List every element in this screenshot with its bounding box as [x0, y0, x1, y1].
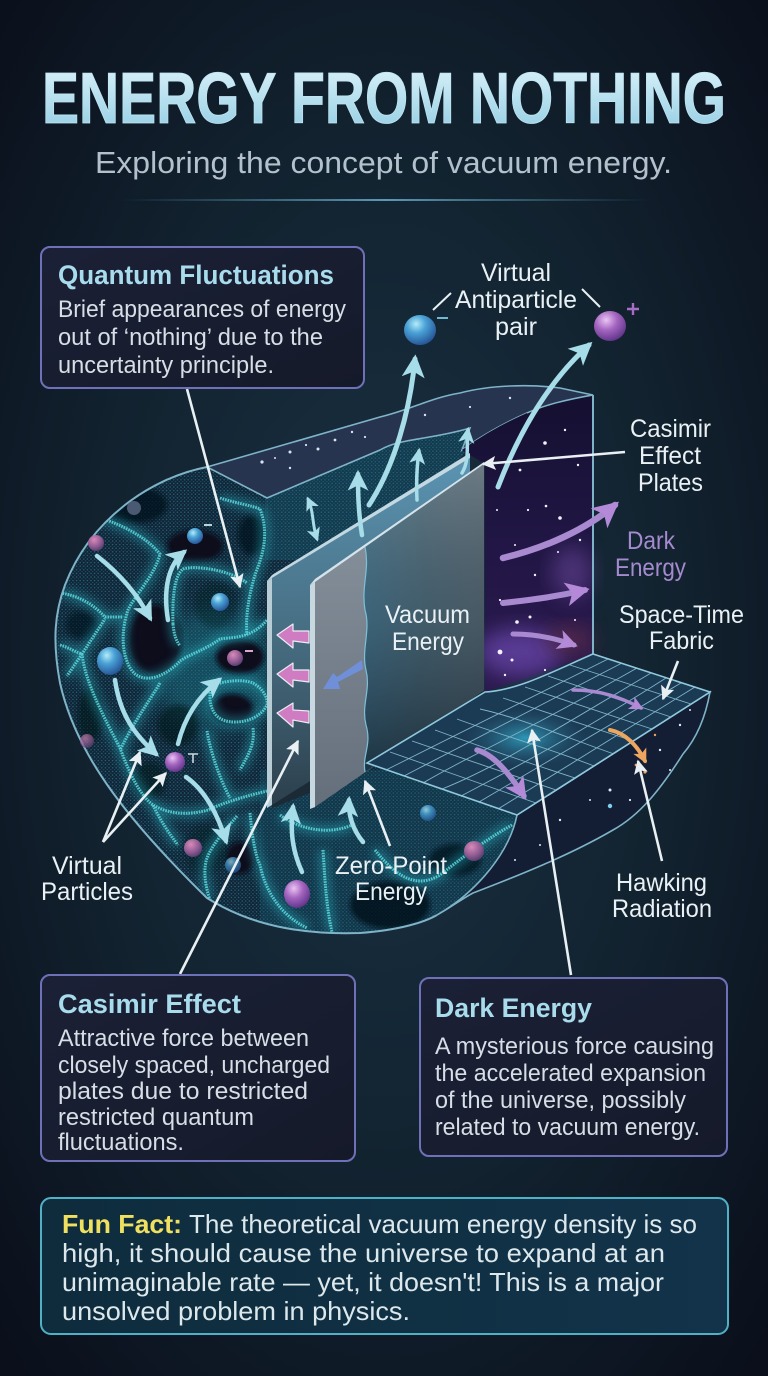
- glowing veins: [60, 498, 512, 932]
- diagram: vacuum energy cross-section: [41, 259, 744, 975]
- body: quantum fluctuations: Brief appearances of energy: [58, 296, 346, 323]
- dark energy arrows: [477, 505, 641, 796]
- label: dark energy: [615, 527, 686, 582]
- heading: dark energy: Dark Energy: [435, 993, 592, 1023]
- dark cells: [66, 487, 481, 929]
- label: hawking radiation: [612, 869, 712, 923]
- panel: fun fact: [41, 1198, 728, 1334]
- label: virtual particles: [41, 852, 133, 906]
- body: casimir effect: restricted quantum: [58, 1104, 254, 1131]
- label: hawking radiation: Hawking: [616, 869, 707, 897]
- panel: casimir effect: [41, 975, 355, 1161]
- label: casimir effect plates: Plates: [638, 469, 703, 497]
- body: quantum fluctuations: out of ‘nothing’ due to the: [58, 324, 323, 351]
- label: vacuum energy: Energy: [392, 628, 464, 656]
- label: zero-point energy: [335, 852, 447, 906]
- fun fact text: high, it should cause the universe to expand at an: [62, 1238, 665, 1268]
- label: casimir effect plates: Effect: [639, 442, 701, 470]
- label: dark energy: Dark: [627, 527, 675, 555]
- label: space-time fabric: Space-Time: [619, 601, 744, 629]
- panel: dark energy: [420, 978, 727, 1156]
- hawking radiation arrow: [610, 730, 645, 761]
- fun fact text: unsolved problem in physics.: [62, 1296, 410, 1326]
- label: casimir effect plates: Casimir: [630, 415, 711, 443]
- label: dark energy: Energy: [615, 554, 686, 582]
- label: virtual antiparticle pair: Antiparticle: [455, 286, 577, 314]
- casimir plate: rear: [267, 453, 470, 808]
- body: dark energy: [435, 1033, 714, 1141]
- label: hawking radiation: Radiation: [612, 895, 712, 923]
- glowing flow arrows: [97, 345, 589, 872]
- fun fact text: unimaginable rate — yet, it doesn't! This is a major: [62, 1267, 664, 1297]
- body: dark energy: the accelerated expansion: [435, 1060, 706, 1087]
- body: casimir effect: closely spaced, uncharged: [58, 1052, 330, 1079]
- floor: starfield underside: [437, 692, 710, 915]
- label: virtual antiparticle pair: [455, 259, 577, 341]
- body: casimir effect: fluctuations.: [58, 1129, 184, 1156]
- body: dark energy: A mysterious force causing: [435, 1033, 714, 1060]
- panel: quantum fluctuations: [41, 247, 364, 388]
- fun fact text: Fun Fact:: [62, 1209, 182, 1239]
- heading: quantum fluctuations: Quantum Fluctuations: [58, 260, 334, 290]
- label: space-time fabric: Fabric: [649, 627, 714, 655]
- label: vacuum energy: Vacuum: [385, 601, 470, 629]
- label: virtual particles: Particles: [41, 878, 133, 906]
- label: zero-point energy: Energy: [355, 878, 427, 906]
- label: virtual antiparticle pair: pair: [495, 313, 537, 341]
- label: virtual antiparticle pair: Virtual: [481, 259, 551, 287]
- callout leader lines: [103, 289, 678, 975]
- body: dark energy: of the universe, possibly: [435, 1087, 686, 1114]
- label: vacuum energy: [385, 601, 470, 656]
- space-time fabric grid: [367, 654, 710, 815]
- particles: [80, 303, 639, 908]
- label: zero-point energy: Zero-Point: [335, 852, 447, 880]
- label: virtual particles: Virtual: [52, 852, 122, 880]
- body: quantum fluctuations: [58, 296, 346, 379]
- body: casimir effect: [58, 1025, 330, 1156]
- casimir plate: front: [310, 462, 484, 809]
- fun fact text: [62, 1209, 697, 1326]
- back panel: dark energy nebula: [462, 395, 594, 692]
- body: casimir effect: Attractive force between: [58, 1025, 309, 1052]
- body: casimir effect: plates due to restricted: [58, 1078, 308, 1105]
- top surface band with stars: [207, 386, 593, 498]
- subtitle: Exploring the concept of vacuum energy.: [95, 145, 672, 180]
- casimir force arrows: [277, 624, 363, 727]
- body: dark energy: related to vacuum energy.: [435, 1114, 700, 1141]
- heading: casimir effect: Casimir Effect: [58, 989, 241, 1019]
- quantum foam body: [50, 420, 530, 940]
- body: quantum fluctuations: uncertainty principle.: [58, 352, 274, 379]
- label: casimir effect plates: [630, 415, 711, 497]
- fun fact text: The theoretical vacuum energy density is so: [189, 1209, 697, 1239]
- label: space-time fabric: [619, 601, 744, 655]
